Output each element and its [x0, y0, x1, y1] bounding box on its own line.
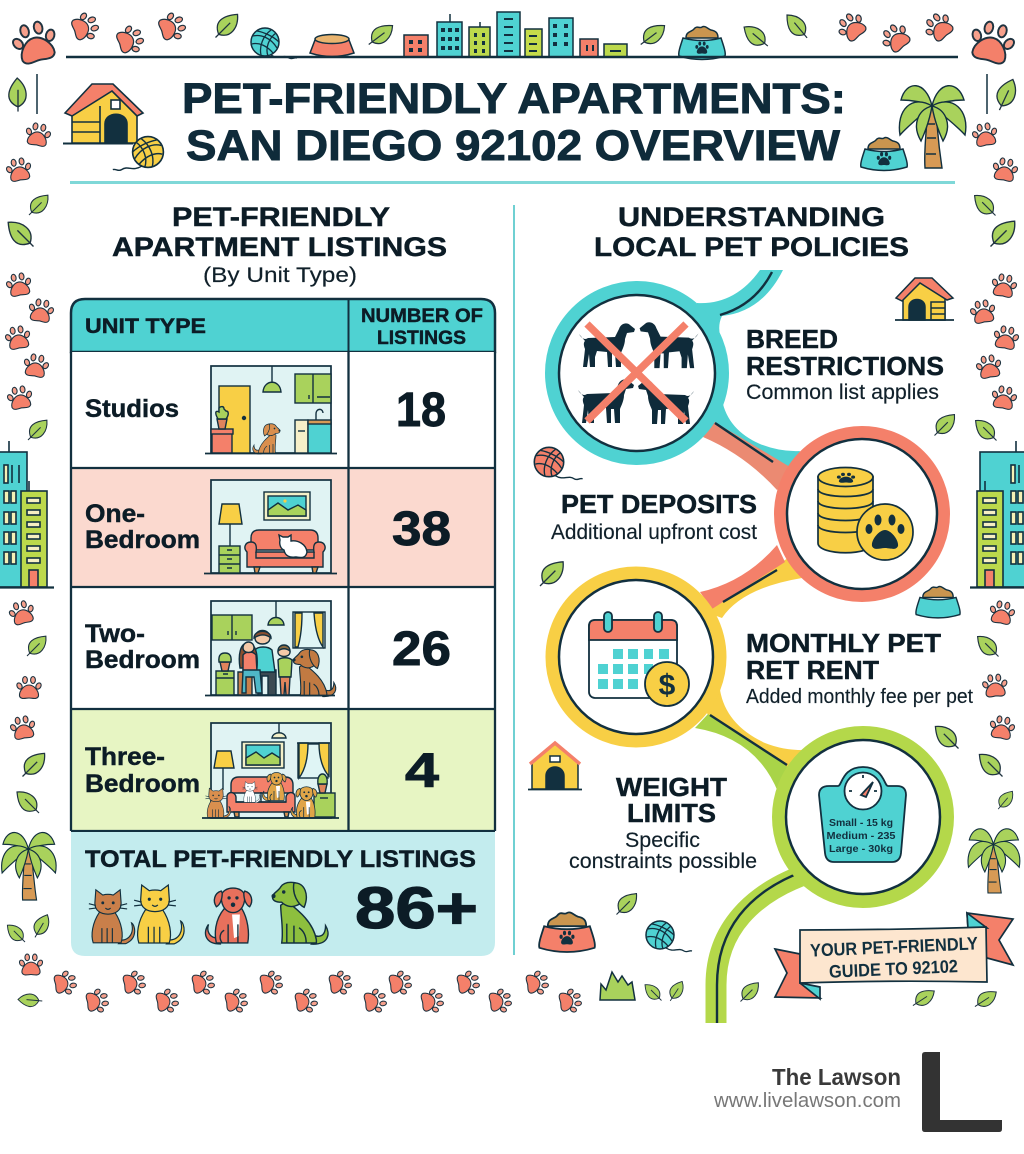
policy: monthly pet rent: RET RENT	[746, 655, 879, 685]
policy: monthly pet rent: MONTHLY PET	[746, 628, 941, 658]
right panel heading	[594, 202, 909, 262]
policy pathway ribbon	[551, 270, 973, 1023]
row: two-bedroom: Bedroom	[85, 646, 200, 674]
policy: weight limits: constraints possible	[569, 850, 757, 873]
decorative icons around the policies	[528, 278, 960, 952]
row: three-bedroom: Bedroom	[85, 770, 200, 798]
policy: breed restrictions: Common list applies	[746, 381, 939, 404]
illustration: two-bedroom family room	[205, 601, 336, 697]
row: two-bedroom: 26	[392, 623, 451, 676]
icon: pet weight scale: Small - 15 kg	[829, 818, 893, 829]
icon: paw row	[53, 969, 583, 1015]
row: one-bedroom: One-	[85, 500, 145, 528]
header: dog house left	[63, 84, 143, 144]
icon: leaves left	[8, 195, 48, 246]
icon: dog house left	[528, 743, 582, 790]
banner: your pet-friendly guide	[775, 913, 1013, 999]
table header	[71, 299, 495, 352]
policy: weight limits: Specific	[625, 829, 700, 852]
icon: crossed out dog silhouettes	[578, 322, 698, 424]
icon: pet weight scale: Large - 30kg	[829, 844, 893, 855]
banner: your pet-friendly guide: GUIDE TO 92102	[829, 956, 958, 982]
total row	[71, 832, 495, 956]
connector: yellow to green	[700, 690, 808, 775]
skyline illustration	[404, 12, 627, 57]
policy: monthly pet rent	[552, 574, 973, 740]
logo: letter L	[922, 1052, 1002, 1132]
footer branding	[713, 1052, 1002, 1132]
icon: leaves and paw bottom left	[7, 915, 52, 1012]
policy: pet deposits: PET DEPOSITS	[561, 489, 757, 519]
right border decorations	[935, 74, 1024, 893]
title	[182, 75, 846, 170]
icon: paws top right	[833, 8, 1020, 67]
table header: UNIT TYPE	[85, 315, 206, 338]
icon: coral yarn	[534, 447, 583, 480]
row: three-bedroom: Three-	[85, 743, 165, 771]
row: one-bedroom: Bedroom	[85, 526, 200, 554]
left panel heading: PET-FRIENDLY	[172, 202, 390, 232]
row: studios	[71, 352, 495, 468]
connector: green tail	[716, 872, 812, 1023]
row: studios: Studios	[85, 395, 179, 423]
icon: leaf	[744, 25, 768, 48]
row: studios: 18	[396, 384, 446, 437]
icon: dog house top right	[895, 278, 954, 320]
title: SAN DIEGO 92102 OVERVIEW	[186, 122, 840, 170]
icon: yellow yarn ball	[113, 137, 163, 170]
policy: breed restrictions: BREED	[746, 324, 838, 354]
icon: leaf	[641, 23, 665, 47]
policy: weight limits: LIMITS	[627, 798, 716, 828]
connector: teal top	[695, 270, 783, 345]
left border decorations	[0, 74, 56, 1012]
icon: leaves right	[975, 195, 1015, 246]
icon: teal bowl with paw	[679, 26, 725, 60]
icon: calendar with dollar coin	[589, 612, 689, 706]
icon: leaf	[991, 79, 1021, 110]
icon: calendar with dollar coin: $	[659, 669, 676, 702]
icon: paws top left	[7, 9, 189, 67]
policy: weight limits	[569, 733, 947, 901]
footer branding: The Lawson	[772, 1064, 901, 1090]
icon: paw trail left	[3, 271, 56, 411]
connector: coral to yellow	[700, 545, 785, 609]
row: one-bedroom	[71, 468, 495, 587]
connector: coral from teal	[703, 421, 795, 490]
icon: palm tree left	[2, 832, 56, 900]
icon: leaf	[976, 420, 996, 440]
icon: teal bowl header	[861, 137, 907, 170]
row: three-bedroom	[71, 709, 495, 831]
icon: city buildings left	[0, 441, 54, 588]
banner: your pet-friendly guide: YOUR PET-FRIENDLY	[810, 933, 978, 961]
icon: paws and leaves lower right	[935, 599, 1017, 809]
bottom paw trail and plants	[53, 969, 996, 1015]
row: one-bedroom: 38	[392, 503, 451, 556]
connector: yellow from coral	[700, 558, 802, 618]
table: listings by unit type	[71, 299, 495, 956]
icon: paws and leaves lower left	[6, 598, 46, 813]
icon: leaves	[540, 415, 955, 586]
top border: paws, leaves, yarn, bowls and skyline	[7, 8, 1020, 67]
icon: coin stack with paw	[818, 468, 913, 560]
illustration: studio room	[205, 366, 337, 454]
left panel heading: APARTMENT LISTINGS	[112, 232, 447, 262]
icon: palm tree right	[968, 829, 1020, 893]
right panel heading: LOCAL PET POLICIES	[594, 232, 909, 262]
icon: paw trail right	[968, 272, 1021, 411]
icon: grass tuft	[600, 972, 635, 1000]
icon: yarn ball teal	[251, 28, 297, 59]
icon: leaf	[785, 15, 809, 38]
connector: green from yellow	[695, 714, 800, 792]
icon: cats and dogs	[89, 882, 328, 944]
icon: leaf	[216, 14, 238, 37]
row: three-bedroom: 4	[405, 745, 439, 798]
policy: weight limits: WEIGHT	[616, 772, 727, 802]
icon: leaf	[369, 23, 393, 47]
footer branding: www.livelawson.com	[713, 1090, 901, 1112]
icon: pet weight scale: Medium - 235	[826, 831, 896, 842]
right panel heading: UNDERSTANDING	[618, 202, 885, 232]
policy: pet deposits	[551, 433, 943, 595]
icon: small leaves	[645, 981, 996, 1010]
icon: leaf	[616, 894, 637, 914]
icon: paws upper left	[4, 121, 53, 183]
illustration: three-bedroom living room	[202, 723, 339, 818]
policy: breed restrictions: RESTRICTIONS	[746, 351, 944, 381]
policy: monthly pet rent: Added monthly fee per pet	[746, 686, 973, 708]
icon: coral bowl	[310, 34, 354, 56]
policy: breed restrictions	[552, 288, 944, 458]
left panel heading: (By Unit Type)	[203, 264, 357, 287]
icon: paws upper right	[970, 121, 1020, 183]
icon: leaf	[28, 420, 47, 440]
table header: LISTINGS	[377, 328, 466, 349]
icon: food bowl bottom	[539, 912, 595, 952]
icon: city buildings right	[970, 441, 1024, 588]
total row: TOTAL PET-FRIENDLY LISTINGS	[85, 846, 476, 873]
icon: leaf	[1, 78, 34, 112]
connector: teal to coral	[700, 400, 800, 475]
row: two-bedroom: Two-	[85, 620, 145, 648]
title: PET-FRIENDLY APARTMENTS:	[182, 75, 846, 123]
row: two-bedroom	[71, 587, 495, 709]
left panel heading	[112, 202, 447, 287]
total row: 86+	[355, 876, 478, 941]
policy: pet deposits: Additional upfront cost	[551, 521, 757, 544]
table header: NUMBER OF	[361, 306, 483, 327]
icon: pet weight scale	[819, 767, 906, 862]
illustration: one-bedroom living room	[204, 480, 337, 574]
icon: teal bowl right	[916, 586, 960, 618]
icon: palm tree header	[899, 86, 966, 168]
icon: teal yarn	[646, 921, 692, 952]
